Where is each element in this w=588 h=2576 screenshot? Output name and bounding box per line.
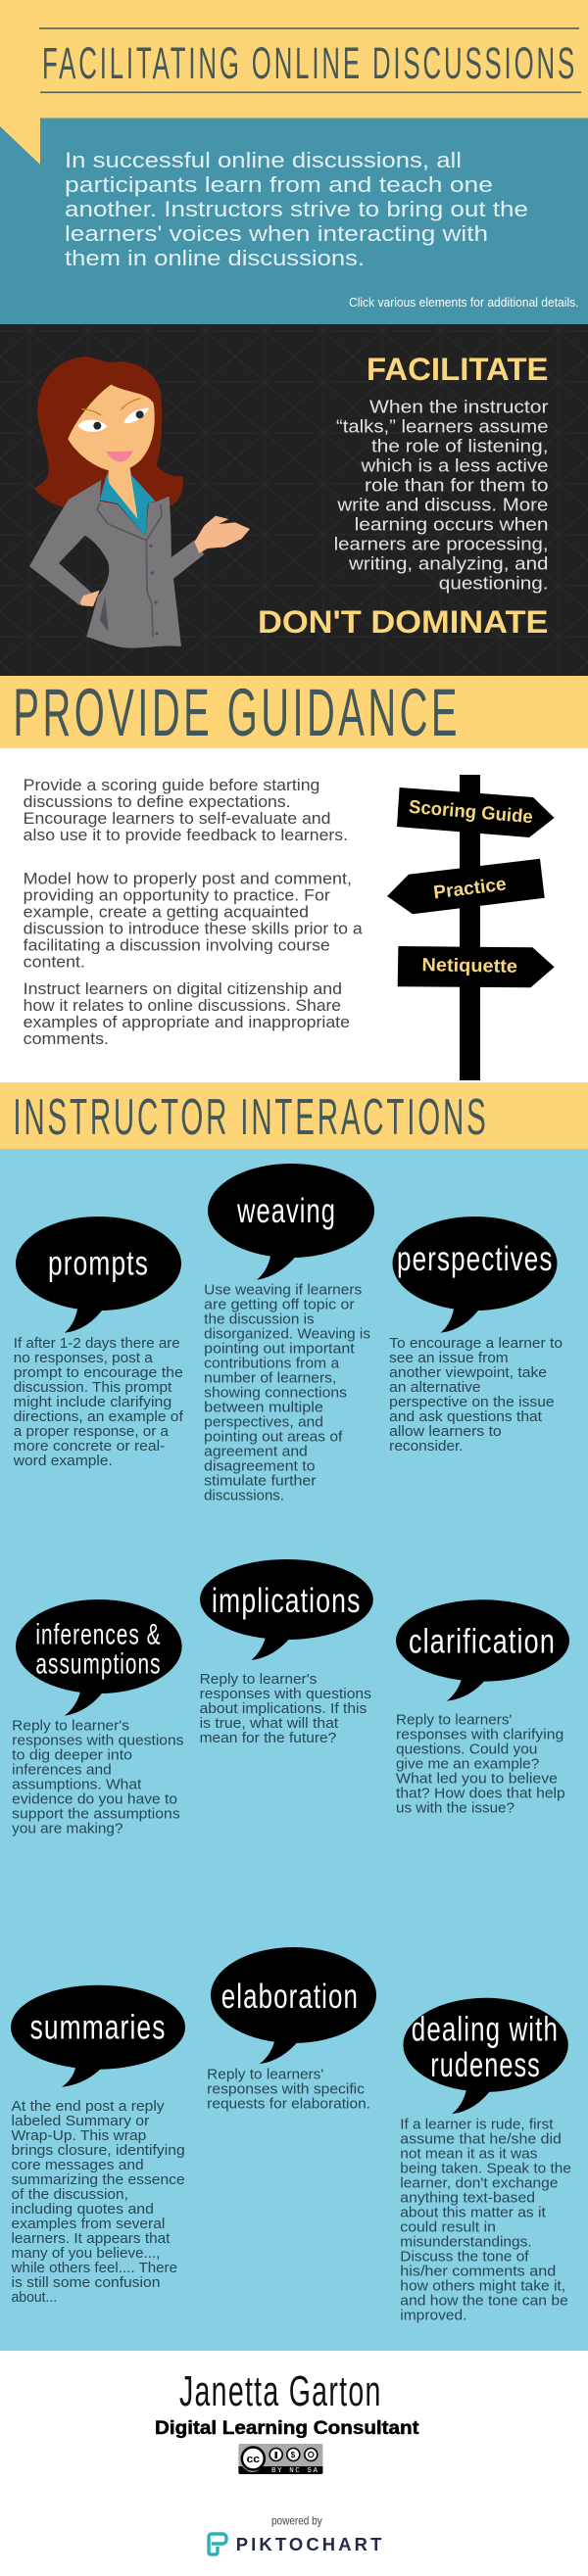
- text: practice: example, create a getting acquainted: [24, 904, 309, 922]
- text: weaving: are getting off topic or: [204, 1298, 355, 1313]
- powered by: powered by: [271, 2514, 322, 2528]
- speech bubble: dealing with rudeness: rudeness: [430, 2046, 541, 2084]
- card: perspectives: [389, 1216, 563, 1455]
- icon: creative commons badge: [238, 2444, 322, 2475]
- text: dealing with rudeness: and how the tone can be: [400, 2294, 568, 2310]
- panel: facilitate: [0, 324, 588, 676]
- text: practice: content.: [24, 954, 85, 972]
- card: clarification: [396, 1599, 569, 1817]
- text: dealing with rudeness: improved.: [400, 2309, 466, 2324]
- speech bubble: inferences and assumptions: assumptions: [35, 1647, 162, 1680]
- text: weaving: agreement and: [204, 1445, 308, 1460]
- panel: provide guidance: [0, 748, 588, 1082]
- text: practice: facilitating a discussion involving course: [24, 937, 330, 955]
- facilitate text: “talks,” learners assume: [336, 416, 549, 437]
- text: prompts: If after 1-2 days there are: [14, 1336, 180, 1352]
- text: weaving: number of learners,: [204, 1371, 336, 1387]
- facilitate text: When the instructor: [369, 397, 549, 417]
- text: dealing with rudeness: his/her comments and: [400, 2265, 556, 2280]
- text: elaboration: Reply to learners': [207, 2067, 324, 2082]
- text: dealing with rudeness: could result in: [400, 2220, 496, 2236]
- text: dealing with rudeness: assume that he/she did: [400, 2132, 562, 2148]
- text: summaries: Wrap-Up. This wrap: [12, 2128, 146, 2144]
- text: inferences and assumptions: responses with questions: [12, 1734, 184, 1749]
- text: perspectives: To encourage a learner to: [389, 1336, 563, 1352]
- text: inferences and assumptions: Reply to learner's: [12, 1719, 129, 1735]
- text: clarification: that? How does that help: [396, 1787, 565, 1802]
- intro text: In successful online discussions, all: [65, 148, 462, 172]
- text: practice: discussion to introduce these skills prior to a: [24, 921, 364, 938]
- facilitate text: write and discuss. More: [336, 495, 548, 515]
- text: elaboration: responses with specific: [207, 2081, 365, 2097]
- text: implications: is true, what will that: [200, 1716, 338, 1732]
- text: weaving: [204, 1283, 370, 1504]
- sign: netiquette: Netiquette: [421, 955, 517, 978]
- text: weaving: between multiple: [204, 1401, 323, 1416]
- text: inferences and assumptions: inferences and: [12, 1763, 112, 1779]
- text: perspectives: another viewpoint, take: [389, 1365, 547, 1381]
- facilitate text: the role of listening,: [371, 436, 549, 456]
- text: elaboration: requests for elaboration.: [207, 2096, 370, 2112]
- speech bubble: inferences and assumptions: inferences &: [35, 1618, 162, 1650]
- card: dealing with rudeness: [400, 1998, 571, 2324]
- speech bubble: weaving: weaving: [236, 1192, 336, 1230]
- text: summaries: including quotes and: [12, 2202, 154, 2218]
- text: clarification: What led you to believe: [396, 1772, 558, 1788]
- text: weaving: perspectives, and: [204, 1415, 323, 1431]
- intro text: participants learn from and teach one: [65, 172, 493, 197]
- text: netiquette: [24, 980, 350, 1048]
- text: summaries: about...: [12, 2290, 57, 2306]
- text: dealing with rudeness: about this matter as it: [400, 2206, 546, 2221]
- icon: creative commons badge: $: [291, 2451, 296, 2459]
- text: summaries: examples from several: [12, 2217, 165, 2232]
- text: prompts: a proper response, or a: [14, 1424, 170, 1440]
- speech bubble: perspectives: [392, 1216, 557, 1333]
- icon: signpost: [387, 775, 555, 1080]
- text: prompts: might include clarifying: [14, 1395, 172, 1410]
- text: weaving: pointing out areas of: [204, 1430, 343, 1446]
- intro text: another. Instructors strive to bring out the: [65, 197, 528, 221]
- facilitate text: learning occurs when: [355, 514, 549, 535]
- panel: header: [0, 0, 588, 324]
- text: summaries: learners. It appears that: [12, 2231, 170, 2247]
- text: dealing with rudeness: being taken. Speak to the: [400, 2162, 571, 2177]
- text: scoring guide: Encourage learners to self-evaluate and: [24, 810, 330, 828]
- text: summaries: summarizing the essence: [12, 2172, 185, 2188]
- text: inferences and assumptions: support the assumptions: [12, 1807, 180, 1823]
- card: weaving: [204, 1164, 374, 1504]
- author name: Janetta Garton: [179, 2367, 382, 2415]
- facilitate text: questioning.: [439, 573, 549, 594]
- text: inferences and assumptions: [12, 1719, 184, 1837]
- text: dealing with rudeness: not mean it as it was: [400, 2147, 537, 2163]
- text: weaving: disorganized. Weaving is: [204, 1327, 370, 1343]
- text: perspectives: an alternative: [389, 1380, 481, 1396]
- text: netiquette: comments.: [24, 1030, 109, 1048]
- panel: footer: [0, 2351, 588, 2576]
- card: prompts: [13, 1216, 184, 1469]
- speech bubble: prompts: [16, 1216, 181, 1333]
- text: summaries: while others feel.... There: [10, 2261, 177, 2276]
- text: inferences and assumptions: you are making?: [12, 1822, 123, 1837]
- icon: piktochart mark: [209, 2534, 226, 2554]
- text: weaving: stimulate further: [204, 1474, 317, 1490]
- text: summaries: labeled Summary or: [12, 2114, 149, 2129]
- facilitate text: learners are processing,: [334, 534, 549, 554]
- intro text: them in online discussions.: [65, 246, 365, 270]
- wordmark: PIKTOCHART: [236, 2534, 382, 2554]
- intro text: [65, 148, 528, 270]
- text: implications: Reply to learner's: [200, 1672, 317, 1688]
- facilitate text: writing, analyzing, and: [348, 553, 549, 574]
- text: perspectives: [389, 1336, 563, 1455]
- speech bubble: clarification: [396, 1599, 569, 1701]
- speech bubble: summaries: summaries: [30, 2009, 166, 2047]
- text: dealing with rudeness: If a learner is rude, first: [400, 2118, 553, 2133]
- text: inferences and assumptions: to dig deeper into: [12, 1748, 132, 1764]
- intro text: learners' voices when interacting with: [65, 221, 488, 246]
- logo: piktochart: [209, 2534, 382, 2554]
- text: perspectives: see an issue from: [389, 1351, 509, 1366]
- heading: facilitate: FACILITATE: [367, 352, 549, 387]
- text: practice: Model how to properly post and comment,: [24, 871, 352, 888]
- text: practice: [24, 871, 364, 972]
- text: clarification: questions. Could you: [396, 1742, 537, 1758]
- text: perspectives: allow learners to: [389, 1424, 502, 1440]
- text: dealing with rudeness: Discuss the tone of: [400, 2250, 530, 2266]
- text: implications: about implications. If this: [200, 1701, 367, 1717]
- speech bubble: dealing with rudeness: [403, 1998, 568, 2114]
- panel: instructor interactions: [0, 1149, 588, 2351]
- icon: creative commons badge: BY NC SA: [271, 2467, 318, 2475]
- text: summaries: many of you believe...,: [12, 2246, 160, 2262]
- speech bubble: weaving: [208, 1164, 374, 1280]
- text: scoring guide: [24, 777, 348, 844]
- text: summaries: core messages and: [12, 2158, 144, 2173]
- author role: Digital Learning Consultant: [155, 2418, 419, 2439]
- text: perspectives: perspective on the issue: [389, 1395, 555, 1410]
- text: clarification: Reply to learners': [396, 1713, 513, 1729]
- text: prompts: no responses, post a: [14, 1351, 154, 1366]
- facilitate text: role than for them to: [365, 475, 549, 496]
- text: inferences and assumptions: assumptions. What: [12, 1778, 141, 1793]
- text: prompts: prompt to encourage the: [14, 1365, 183, 1381]
- text: weaving: pointing out important: [204, 1342, 355, 1358]
- speech bubble: implications: implications: [212, 1582, 361, 1620]
- sign: scoring guide: Scoring Guide: [408, 797, 534, 828]
- speech bubble: implications: [200, 1559, 373, 1660]
- card: elaboration: [207, 1947, 376, 2112]
- text: summaries: [10, 2099, 185, 2306]
- text: dealing with rudeness: misunderstandings.: [400, 2235, 532, 2251]
- speech bubble: inferences and assumptions: [16, 1599, 182, 1716]
- icon: creative commons badge: cc: [247, 2454, 260, 2465]
- text: dealing with rudeness: learner, don't exchange: [400, 2176, 559, 2192]
- text: scoring guide: Provide a scoring guide before starting: [24, 777, 319, 794]
- card: inferences and assumptions: [12, 1599, 184, 1837]
- text: implications: mean for the future?: [200, 1731, 336, 1746]
- illustration: instructor: [29, 357, 250, 648]
- text: weaving: contributions from a: [204, 1357, 340, 1372]
- text: netiquette: examples of appropriate and inappropriate: [24, 1014, 350, 1031]
- text: prompts: discussion. This prompt: [14, 1380, 172, 1396]
- text: summaries: At the end post a reply: [12, 2099, 165, 2115]
- sign: practice: Practice: [432, 874, 508, 903]
- text: prompts: directions, an example of: [14, 1409, 184, 1425]
- text: clarification: us with the issue?: [396, 1801, 514, 1817]
- text: summaries: of the discussion,: [12, 2187, 128, 2203]
- text: dealing with rudeness: [400, 2118, 571, 2324]
- text: weaving: discussions.: [204, 1489, 284, 1504]
- text: weaving: the discussion is: [204, 1312, 315, 1328]
- text: prompts: word example.: [13, 1454, 113, 1469]
- sign: netiquette: [398, 946, 555, 987]
- sign: practice: [387, 859, 545, 914]
- speech bubble: elaboration: elaboration: [221, 1978, 359, 2016]
- text: netiquette: Instruct learners on digital citizenship and: [24, 980, 342, 998]
- text: prompts: [13, 1336, 184, 1469]
- card: summaries: [10, 1985, 185, 2306]
- panel: introduction speech box: [0, 118, 588, 324]
- text: practice: providing an opportunity to practice. For: [24, 887, 330, 905]
- text: implications: responses with questions: [200, 1687, 371, 1702]
- text: implications: [200, 1672, 371, 1746]
- text: weaving: Use weaving if learners: [204, 1283, 362, 1299]
- sign: scoring guide: [397, 787, 555, 837]
- text: inferences and assumptions: evidence do you have to: [12, 1792, 177, 1808]
- click note: Click various elements for additional details.: [349, 296, 578, 310]
- text: clarification: give me an example?: [396, 1757, 539, 1773]
- text: prompts: more concrete or real-: [14, 1439, 166, 1455]
- speech bubble: summaries: [11, 1985, 185, 2087]
- text: perspectives: and ask questions that: [389, 1409, 542, 1425]
- text: elaboration: [207, 2067, 370, 2112]
- facilitate text: which is a less active: [360, 455, 549, 476]
- text: weaving: showing connections: [204, 1386, 347, 1402]
- text: clarification: responses with clarifying: [396, 1728, 564, 1743]
- text: weaving: disagreement to: [204, 1459, 316, 1475]
- card: implications: [200, 1559, 373, 1746]
- text: summaries: is still some confusion: [12, 2275, 160, 2291]
- text: scoring guide: also use it to provide feedback to learners.: [24, 827, 348, 844]
- text: netiquette: how it relates to online discussions. Share: [24, 997, 341, 1015]
- speech bubble: elaboration: [211, 1947, 376, 2064]
- heading: don't dominate: DON'T DOMINATE: [258, 604, 549, 640]
- text: summaries: brings closure, identifying: [12, 2143, 185, 2159]
- text: scoring guide: discussions to define expectations.: [24, 793, 291, 811]
- facilitate text: [334, 397, 549, 594]
- text: dealing with rudeness: anything text-based: [400, 2191, 535, 2207]
- text: perspectives: reconsider.: [389, 1439, 464, 1455]
- speech bubble: prompts: prompts: [48, 1245, 149, 1283]
- text: clarification: [396, 1713, 565, 1817]
- text: dealing with rudeness: how others might take it,: [400, 2279, 565, 2295]
